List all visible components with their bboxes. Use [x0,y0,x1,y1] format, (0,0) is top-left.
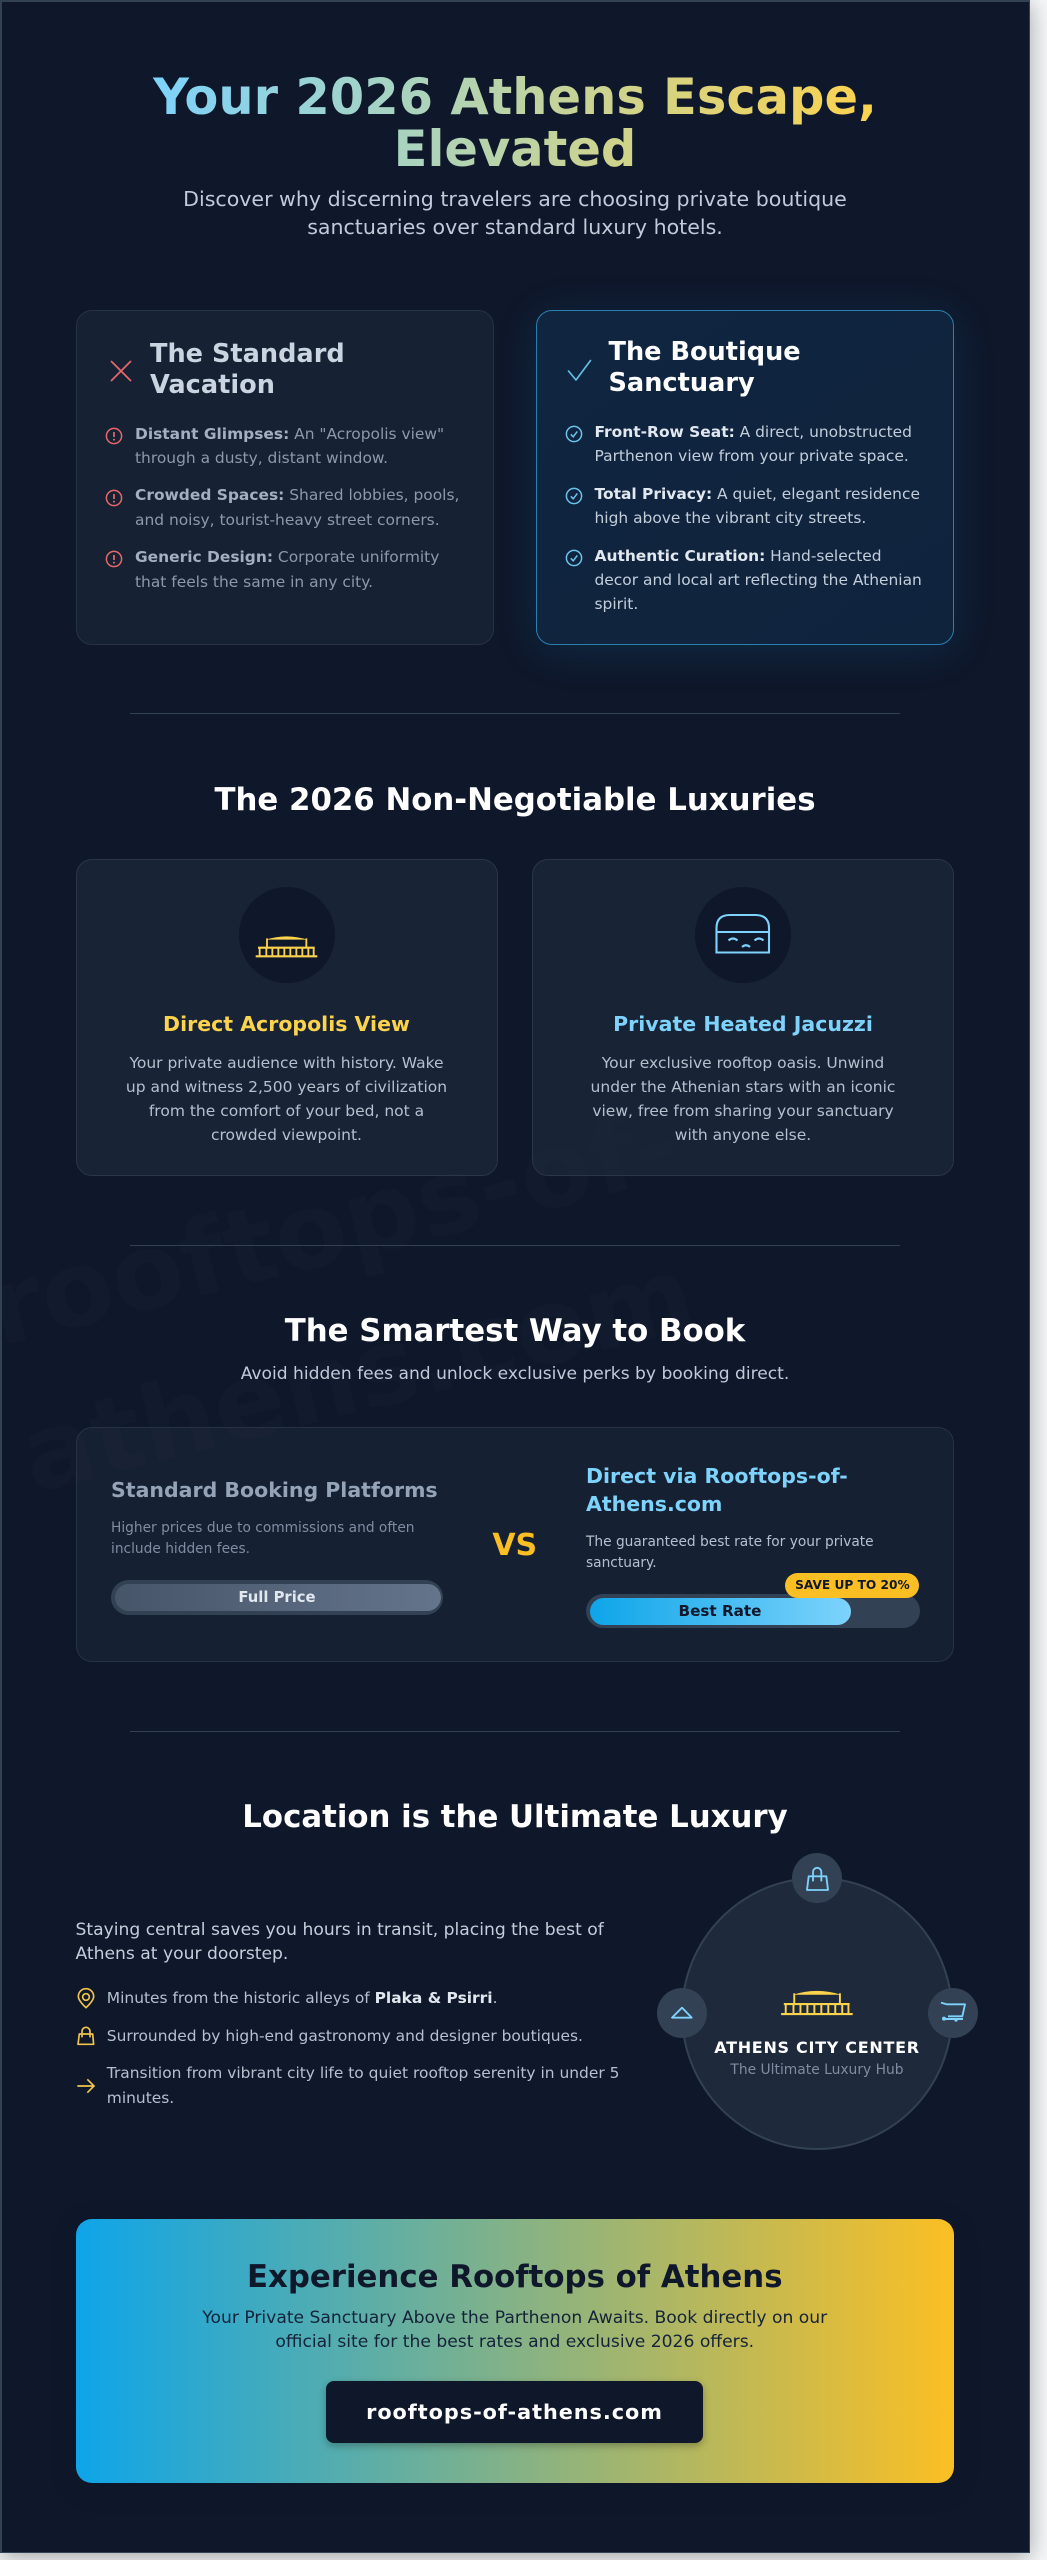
text: Generic Design: Corporate uniformity [135,548,439,566]
item: authentic curation [566,547,922,613]
subtitle: Discover why discerning travelers are choosing private boutique [183,187,847,211]
card description: under the Athenian stars with an iconic [591,1078,895,1096]
panel: private heated jacuzzi [532,859,954,1176]
location intro text: Athens at your doorstep. [76,1944,288,1964]
column title: Direct via Rooftops-of- [586,1464,848,1488]
text [594,423,912,465]
title [150,71,880,175]
text: minutes. [107,2089,174,2107]
heading: location: Location is the Ultimate Luxury [242,1799,788,1835]
background watermark [0,1160,1030,1580]
icon: alert [106,428,122,444]
cta description: Your Private Sanctuary Above the Parthenon Awaits. Book directly on our [202,2308,827,2328]
price bar: best rate [586,1594,920,1628]
location intro text [76,1920,604,1964]
badge: save up to 20% [785,1573,919,1598]
subheading: Avoid hidden fees and unlock exclusive perks by booking direct. [241,1364,789,1384]
column title: Athens.com [586,1492,722,1516]
column title: Standard Booking Platforms [111,1478,438,1502]
column description [586,1534,874,1571]
heading: luxuries: The 2026 Non-Negotiable Luxuries [214,782,816,818]
bar label: Best Rate [679,1602,761,1620]
card description: view, free from sharing your sanctuary [592,1102,894,1120]
column description: include hidden fees. [111,1541,250,1557]
text [135,425,444,467]
text: high above the vibrant city streets. [594,509,866,527]
text [135,548,439,590]
title: Your 2026 Athens Escape, [153,68,877,126]
subtitle [183,187,847,239]
item: generic design [106,548,439,590]
bar fill [114,1584,440,1611]
icon: hub temple [778,1987,856,2018]
text: Surrounded by high-end gastronomy and designer boutiques. [107,2026,583,2044]
cta description: official site for the best rates and exclusive 2026 offers. [275,2332,754,2352]
text: Transition from vibrant city life to quiet rooftop serenity in under 5 [107,2064,619,2082]
heading: the boutique sanctuary: The Boutique [608,337,801,367]
icon: check circle [566,488,582,504]
heading: the standard vacation: The Standard [150,339,345,369]
icon: alert [106,490,122,506]
panel: direct acropolis view [76,859,498,1176]
text: Minutes from the historic alleys of Plaka & Psirri. [107,1989,498,2007]
heading: the standard vacation: Vacation [150,370,275,400]
card description: up and witness 2,500 years of civilization [126,1078,447,1096]
text: decor and local art reflecting the Athenian [594,571,922,589]
card description [126,1054,447,1144]
column description: The guaranteed best rate for your private [586,1534,874,1550]
item: crowded spaces [106,486,459,528]
icon: check circle [566,550,582,566]
column title [586,1464,848,1516]
cta button [326,2381,703,2443]
icon: x mark [110,360,132,382]
list item: plaka and psirri [78,1988,498,2009]
icon: shopping bag [77,2026,94,2046]
node: shopping top [792,1853,842,1903]
icon: alert [106,550,122,568]
item: front-row seat [566,423,912,465]
background watermark: athens.com [9,1232,706,1517]
subtitle: sanctuaries over standard luxury hotels. [307,215,723,239]
card description: crowded viewpoint. [211,1126,362,1144]
text: and noisy, tourist-heavy street corners. [135,510,440,528]
price bar: full price [111,1580,443,1615]
card description: Your private audience with history. Wake [129,1054,444,1072]
heading: the boutique sanctuary: Sanctuary [608,368,755,398]
hub label: ATHENS CITY CENTER [714,2038,920,2057]
location intro text: Staying central saves you hours in transit, placing the best of [76,1920,604,1940]
text: Parthenon view from your private space. [594,447,909,465]
text: Crowded Spaces: Shared lobbies, pools, [135,486,459,504]
panel: the boutique sanctuary [536,310,954,645]
hub circle [681,1877,953,2150]
text [106,2064,619,2107]
text: spirit. [594,595,638,613]
panel: the standard vacation [76,310,494,645]
panel: booking comparison [76,1427,954,1662]
location diagram [656,1852,978,2152]
title: Elevated [394,120,636,178]
badge: save up to 20%: SAVE UP TO 20% [795,1578,910,1592]
cta heading: Experience Rooftops of Athens [247,2259,783,2295]
card title: Direct Acropolis View [163,1012,410,1036]
bar label: Full Price [238,1589,316,1606]
text: Front-Row Seat: A direct, unobstructed [594,423,912,441]
text [135,486,459,528]
card description: with anyone else. [675,1126,811,1144]
card description: Your exclusive rooftop oasis. Unwind [602,1054,884,1072]
column description: sanctuary. [586,1555,657,1571]
card description [591,1054,895,1144]
text [594,485,920,527]
icon: arrow [77,2078,96,2094]
node: dining left [657,1988,707,2038]
cta button: rooftops-of-athens.com [366,2400,663,2424]
text [594,547,922,613]
column description: Higher prices due to commissions and often [111,1520,414,1536]
cta description [76,2306,954,2354]
list item: gastronomy [77,2026,583,2046]
text: through a dusty, distant window. [135,449,388,467]
column: standard booking platforms [111,1478,443,1615]
text: Distant Glimpses: An "Acropolis view" [135,425,444,443]
column: direct booking [586,1464,920,1628]
cta panel [76,2219,954,2483]
node: cart right [928,1988,978,2038]
item: total privacy [566,485,920,527]
item: distant glimpses [106,425,444,467]
heading: smartest way to book: The Smartest Way to Book [285,1313,745,1349]
list item: transition [77,2064,619,2107]
heading: the standard vacation [150,339,345,400]
icon: jacuzzi in circle [695,887,791,983]
bar fill [590,1598,850,1625]
card description: from the comfort of your bed, not a [149,1102,424,1120]
vs label: VS [492,1528,537,1563]
column description [111,1520,414,1557]
icon: check circle [566,426,582,442]
text: that feels the same in any city. [135,572,373,590]
hub sublabel: The Ultimate Luxury Hub [730,2062,904,2078]
icon: pin [78,1988,94,2009]
text: Authentic Curation: Hand-selected [594,547,882,565]
text: Total Privacy: A quiet, elegant residence [594,485,920,503]
card title: Private Heated Jacuzzi [613,1012,873,1036]
icon: check mark [568,360,592,381]
heading: the boutique sanctuary [608,337,801,398]
icon: temple in circle [238,887,334,983]
